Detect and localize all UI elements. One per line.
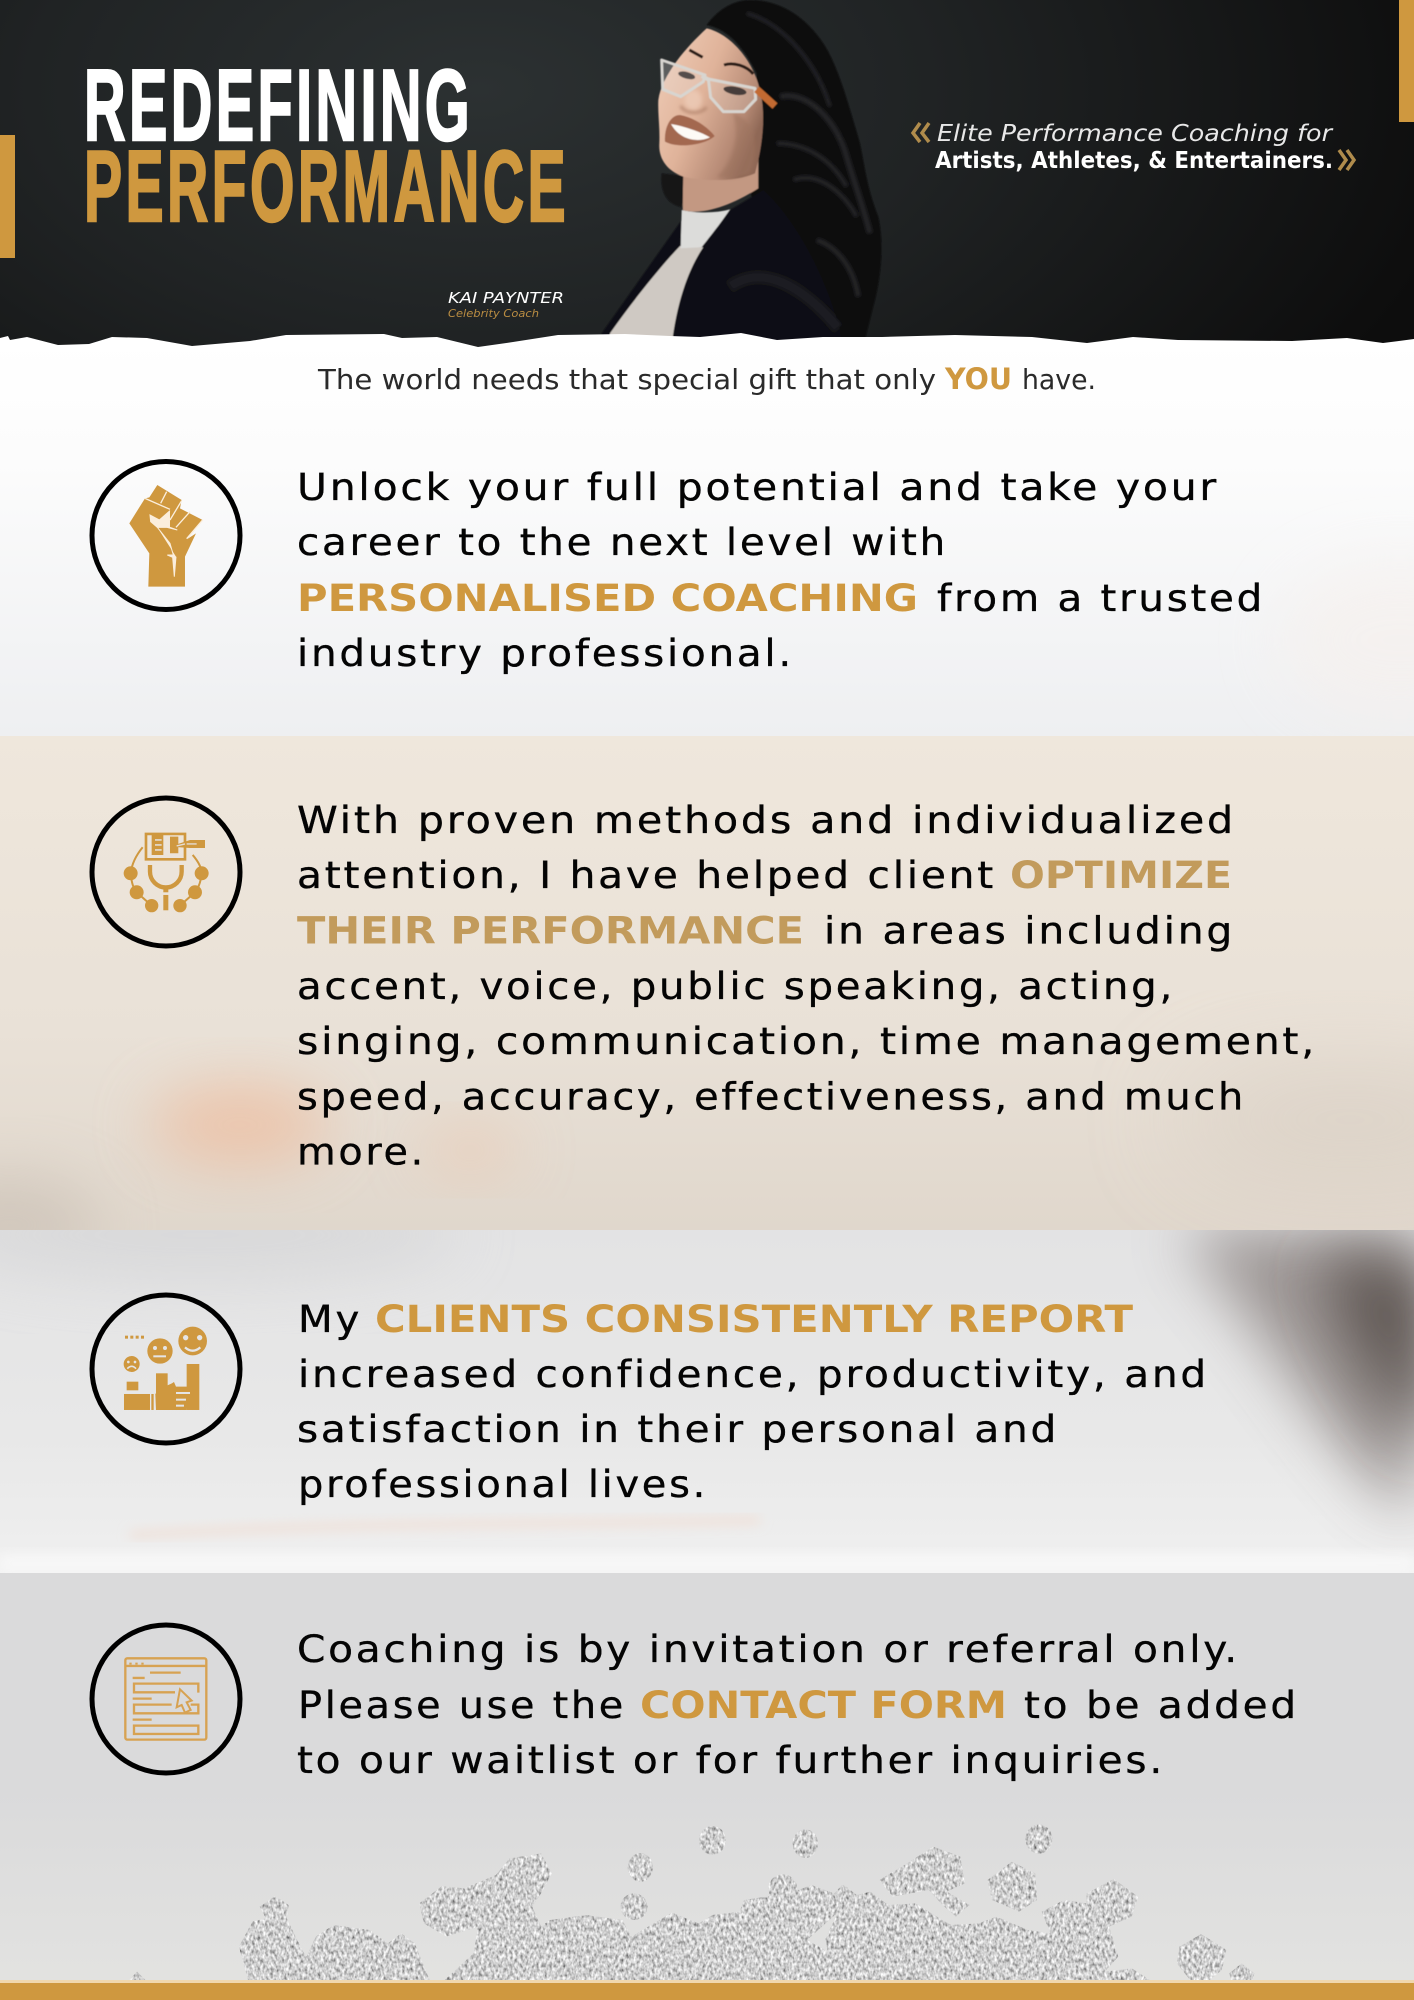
text: contact paragraph: Coaching is by invitation or referral only. [297,1628,1240,1671]
text: contact paragraph: to our waitlist or for further inquiries. [297,1739,1165,1782]
text: personalised coaching paragraph: from a trusted [937,577,1265,620]
text: personalised coaching paragraph [297,466,1265,675]
text: contact paragraph: to be added [1024,1684,1299,1727]
text: optimize performance paragraph: With proven methods and individualized [297,799,1236,842]
text: client results paragraph: CLIENTS CONSISTENTLY REPORT [375,1298,1134,1341]
text: client results paragraph: satisfaction in their personal and [297,1408,1059,1451]
title: redefining performance: PERFORMANCE [84,131,569,243]
text: client results paragraph: professional lives. [298,1463,708,1506]
icon: satisfaction chart [92,1295,240,1443]
text: client results paragraph: My [298,1298,362,1341]
panel: personalised coaching [0,459,1414,736]
text: optimize performance paragraph [297,799,1317,1174]
text: personalised coaching paragraph: industry professional. [297,632,794,675]
tagline [913,121,1354,174]
banner [0,0,1414,350]
panel: contact [0,1573,1414,2000]
text: optimize performance paragraph: OPTIMIZE [1010,854,1232,897]
subheading: YOU [944,362,1012,396]
panel: optimize performance [0,736,1414,1275]
torn paper edge [0,333,1414,352]
text: contact paragraph [297,1628,1299,1782]
text: contact paragraph: CONTACT FORM [640,1684,1007,1727]
caption: coach name [448,289,564,320]
subheading: The world needs that special gift that only [317,363,936,396]
subheading: have. [1022,363,1096,396]
footer gold bar [0,1980,1414,2000]
tagline: Elite Performance Coaching for [937,121,1334,147]
text: client results paragraph [297,1298,1209,1506]
text: optimize performance paragraph: THEIR PERFORMANCE [297,910,804,952]
gold accent bar right [1399,0,1414,122]
portrait of coach [600,0,881,347]
panel: client results [0,1230,1414,1573]
text: optimize performance paragraph: more. [297,1130,426,1174]
silver glitter hexagons [126,1824,1254,1983]
title: redefining performance [84,50,569,243]
caption: coach name: KAI PAYNTER [448,289,564,307]
text: optimize performance paragraph: attention, I have helped client [297,854,996,897]
caption: coach name: Celebrity Coach [448,307,539,320]
text: optimize performance paragraph: in areas including [824,910,1235,952]
text: personalised coaching paragraph: Unlock your full potential and take your [297,466,1219,509]
icon: contact form [92,1625,240,1773]
gold accent bar left [0,135,15,258]
text: contact paragraph: Please use the [298,1684,626,1727]
text: optimize performance paragraph: speed, accuracy, effectiveness, and much [297,1075,1246,1118]
icon: raised fist [92,462,240,610]
text: personalised coaching paragraph: career to the next level with [297,521,948,564]
text: optimize performance paragraph: accent, voice, public speaking, acting, [297,965,1175,1008]
icon: methods and beads [92,798,240,946]
text: personalised coaching paragraph: PERSONALISED COACHING [297,577,918,620]
title: redefining performance: REDEFINING [84,50,473,162]
text: client results paragraph: increased confidence, productivity, and [298,1353,1209,1396]
text: optimize performance paragraph: singing, communication, time management, [297,1020,1317,1063]
tagline: Artists, Athletes, & Entertainers. [935,148,1333,174]
